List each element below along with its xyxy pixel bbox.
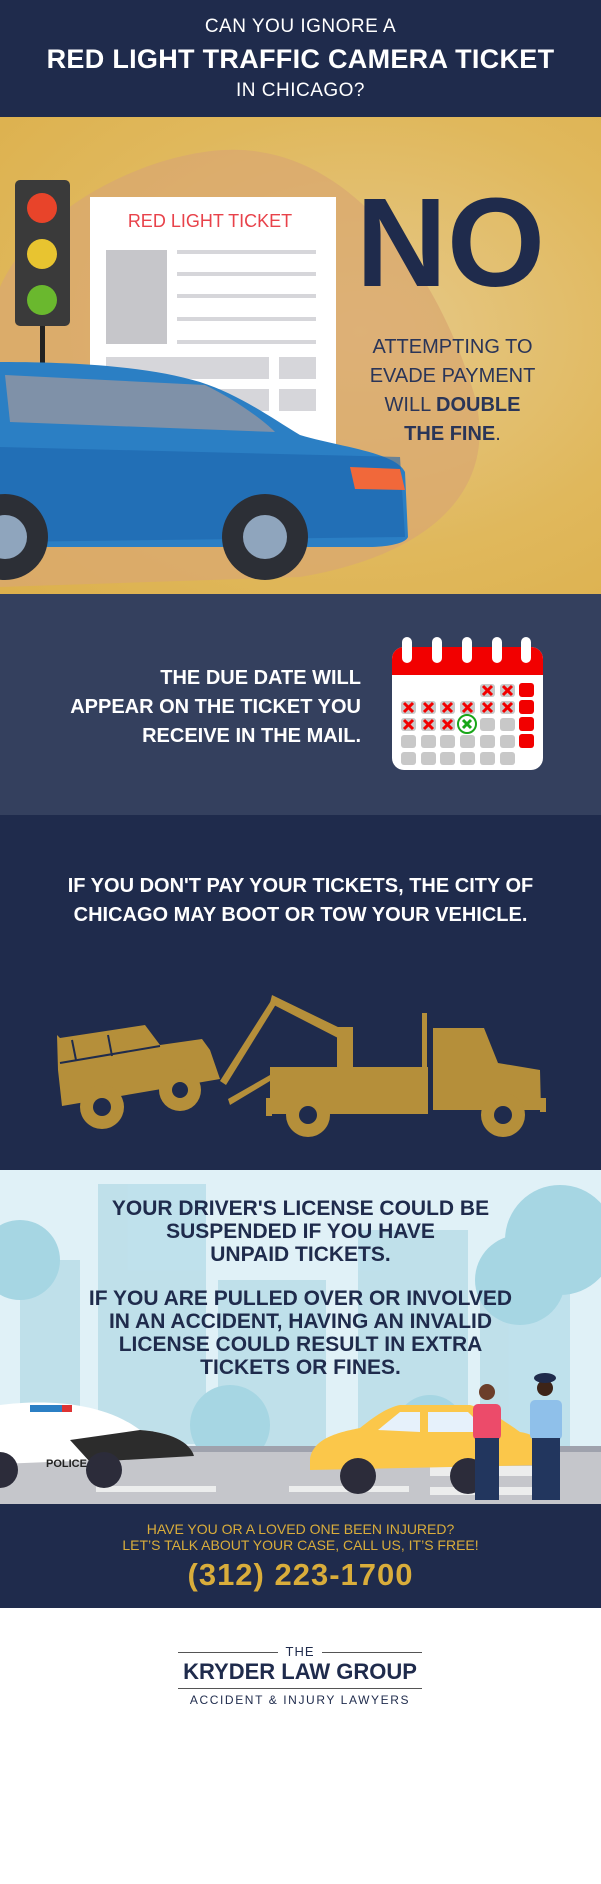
panel: boot or tow: [0, 815, 601, 1170]
license text: LICENSE COULD RESULT IN EXTRA: [119, 1333, 482, 1356]
ticket paper: [90, 197, 336, 527]
cta text: HAVE YOU OR A LOVED ONE BEEN INJURED?: [147, 1521, 454, 1537]
people: [473, 1373, 562, 1500]
header line 1: CAN YOU IGNORE A: [205, 16, 396, 37]
double fine text: WILL DOUBLE: [385, 394, 520, 416]
panel: due date: [0, 594, 601, 815]
police car: POLICE: [46, 1458, 87, 1470]
tow text: [68, 875, 533, 926]
logo: [178, 1644, 422, 1707]
license text: IF YOU ARE PULLED OVER OR INVOLVED: [89, 1287, 512, 1310]
logo: ACCIDENT & INJURY LAWYERS: [190, 1693, 410, 1707]
road: [0, 1450, 601, 1504]
panel: license suspended: [0, 1170, 601, 1504]
license text: IN AN ACCIDENT, HAVING AN INVALID: [109, 1310, 492, 1333]
double fine text: EVADE PAYMENT: [370, 365, 535, 387]
license text: UNPAID TICKETS.: [210, 1243, 391, 1266]
panel: call to action: [0, 1504, 601, 1608]
blue car: [0, 362, 408, 580]
yellow car: [310, 1405, 545, 1494]
panel: no / double fine: [0, 117, 601, 594]
due date text: RECEIVE IN THE MAIL.: [142, 725, 361, 747]
icon: traffic light: [15, 180, 70, 367]
license text: [89, 1197, 512, 1379]
tow text: CHICAGO MAY BOOT OR TOW YOUR VEHICLE.: [74, 904, 527, 926]
logo: THE: [286, 1644, 314, 1659]
cta text: [122, 1521, 479, 1553]
big NO: NO: [356, 172, 545, 313]
double fine text: [370, 336, 535, 445]
ticket paper: RED LIGHT TICKET: [128, 211, 292, 231]
due date text: [70, 667, 361, 747]
city background: [0, 1184, 601, 1504]
phone number: (312) 223-1700: [188, 1557, 414, 1592]
icon: tow truck: [57, 995, 546, 1137]
cta text: LET’S TALK ABOUT YOUR CASE, CALL US, IT’S FREE!: [122, 1537, 479, 1553]
double fine text: ATTEMPTING TO: [372, 336, 532, 358]
license text: SUSPENDED IF YOU HAVE: [166, 1220, 435, 1243]
due date text: THE DUE DATE WILL: [160, 667, 361, 689]
due date text: APPEAR ON THE TICKET YOU: [70, 696, 361, 718]
tow text: IF YOU DON'T PAY YOUR TICKETS, THE CITY OF: [68, 875, 533, 897]
double fine text: THE FINE.: [404, 423, 501, 445]
license text: YOUR DRIVER'S LICENSE COULD BE: [112, 1197, 489, 1220]
header line 3: IN CHICAGO?: [236, 80, 365, 101]
logo: KRYDER LAW GROUP: [183, 1659, 417, 1684]
header panel: [0, 0, 601, 117]
police car: [0, 1403, 194, 1488]
icon: calendar: [392, 637, 543, 770]
main title: RED LIGHT TRAFFIC CAMERA TICKET: [47, 44, 554, 74]
license text: TICKETS OR FINES.: [200, 1356, 401, 1379]
